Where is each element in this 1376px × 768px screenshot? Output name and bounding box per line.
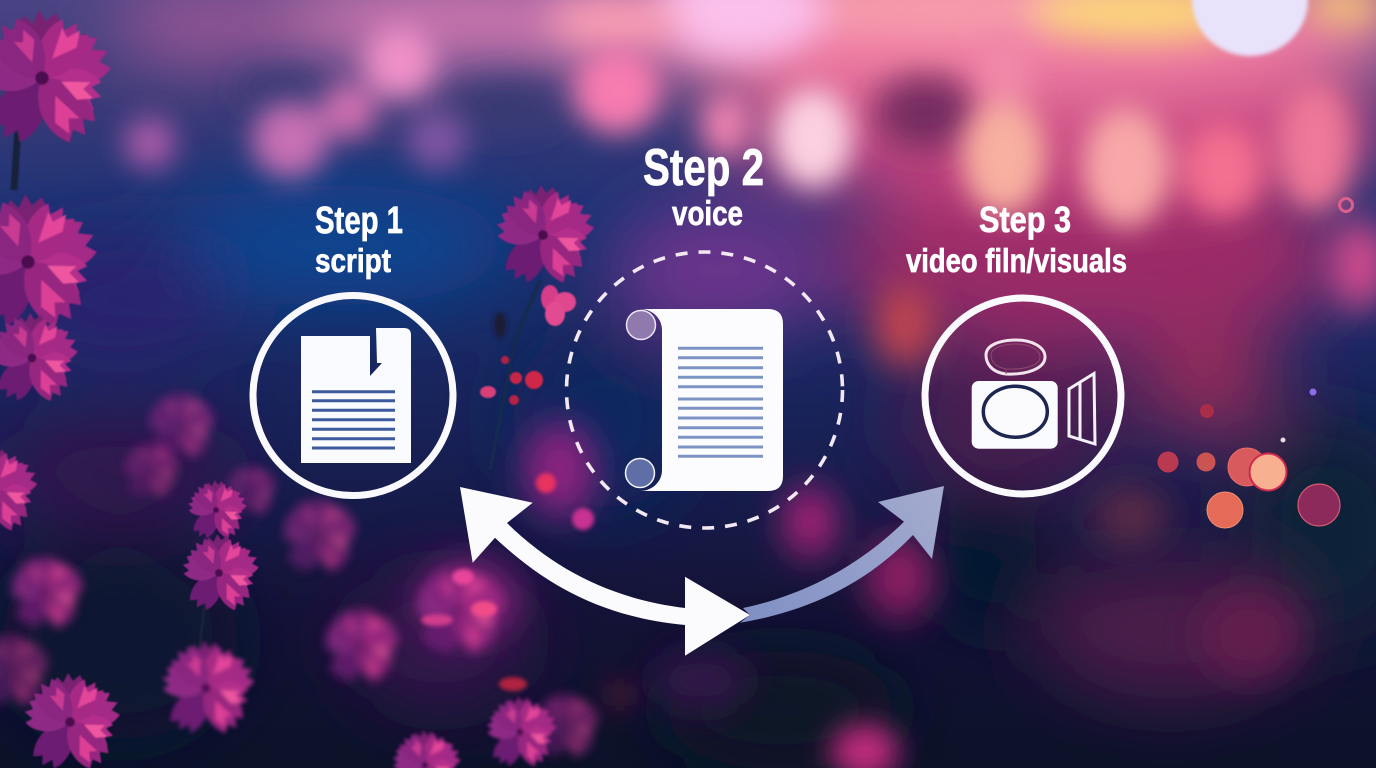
step 3 heading: Step 3	[979, 199, 1071, 240]
step 1 heading: Step 1	[315, 200, 403, 242]
soft out-of-focus flowers	[0, 312, 604, 762]
icon: step 3 video camera in circle	[925, 298, 1121, 494]
flower: center top with stem	[480, 185, 598, 470]
step 2 heading: voice	[672, 195, 743, 233]
right bokeh dots	[1158, 198, 1352, 528]
step 1 heading	[315, 200, 403, 279]
sun glare	[1192, 0, 1308, 56]
step 3 heading	[906, 199, 1127, 279]
flower column: lower middle-left	[158, 480, 560, 768]
icon: step 1 script document in circle	[253, 296, 453, 496]
arrow: blue curved arrow to step 3	[740, 486, 944, 623]
step 2 heading	[643, 139, 764, 233]
flower column: left edge	[0, 10, 124, 768]
arrow: white double-headed curved arrow	[460, 487, 750, 656]
step 1 heading: script	[315, 242, 391, 279]
step 2 heading: Step 2	[643, 139, 764, 197]
icon: step 2 scroll in dashed circle	[566, 252, 842, 528]
step 3 heading: video filn/visuals	[906, 242, 1127, 279]
